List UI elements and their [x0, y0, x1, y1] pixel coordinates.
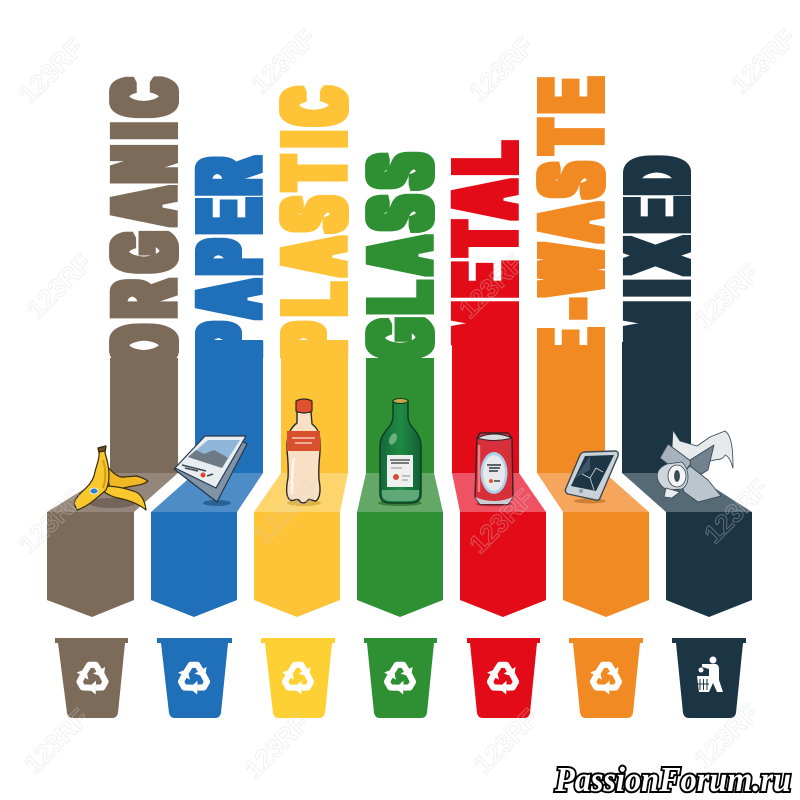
icon: e-waste bin — [569, 638, 643, 718]
icon: banana peel — [74, 446, 148, 510]
watermarks: 123RF — [248, 473, 324, 549]
icon: plastic bottle — [287, 399, 321, 506]
icon: mixed bin with tidy-man — [672, 638, 746, 718]
heading: METAL: METAL — [436, 144, 534, 344]
icon: broken tablet — [565, 451, 618, 504]
watermarks: 123RF — [463, 31, 539, 107]
watermarks: 123RF — [468, 703, 544, 779]
panel: paper column — [151, 159, 278, 617]
watermarks: 123RF — [688, 698, 764, 774]
icon: metal can — [475, 433, 513, 506]
icon: plastic bin — [261, 638, 335, 718]
panel: organic column — [47, 80, 193, 617]
watermarks: 123RF — [13, 33, 89, 109]
icon: magazine — [174, 436, 247, 506]
heading: PAPER: PAPER — [180, 159, 278, 356]
panel: glass column — [351, 155, 449, 617]
watermarks: 123RF — [238, 708, 314, 784]
icon: mixed trash pile — [657, 430, 733, 502]
watermarks: 123RF — [725, 23, 800, 99]
watermarks: 123RF — [688, 258, 764, 334]
icon: glass bottle — [378, 398, 422, 506]
icon: metal bin — [467, 638, 540, 718]
watermarks: 123RF — [453, 248, 529, 324]
panel: e-waste column — [522, 79, 649, 617]
heading: ORGANIC: ORGANIC — [95, 80, 193, 364]
heading: MIXED: MIXED — [608, 158, 706, 344]
heading: GLASS: GLASS — [351, 155, 449, 357]
watermarks: 123RF — [13, 483, 89, 559]
heading: PLASTIC: PLASTIC — [265, 89, 363, 356]
panel: mixed column — [608, 158, 752, 617]
heading: E-WASTE: E-WASTE — [522, 79, 620, 363]
watermarks: 123RF — [463, 483, 539, 559]
icon: glass bin — [364, 638, 437, 718]
panel: metal column — [436, 144, 546, 617]
watermarks: 123RF — [245, 23, 321, 99]
watermarks: 123RF — [698, 473, 774, 549]
icon: paper bin — [157, 638, 232, 718]
icon: organic bin — [55, 638, 128, 718]
watermarks: 123RF — [21, 248, 97, 324]
watermarks: 123RF — [18, 703, 94, 779]
panel: plastic column — [254, 89, 363, 617]
